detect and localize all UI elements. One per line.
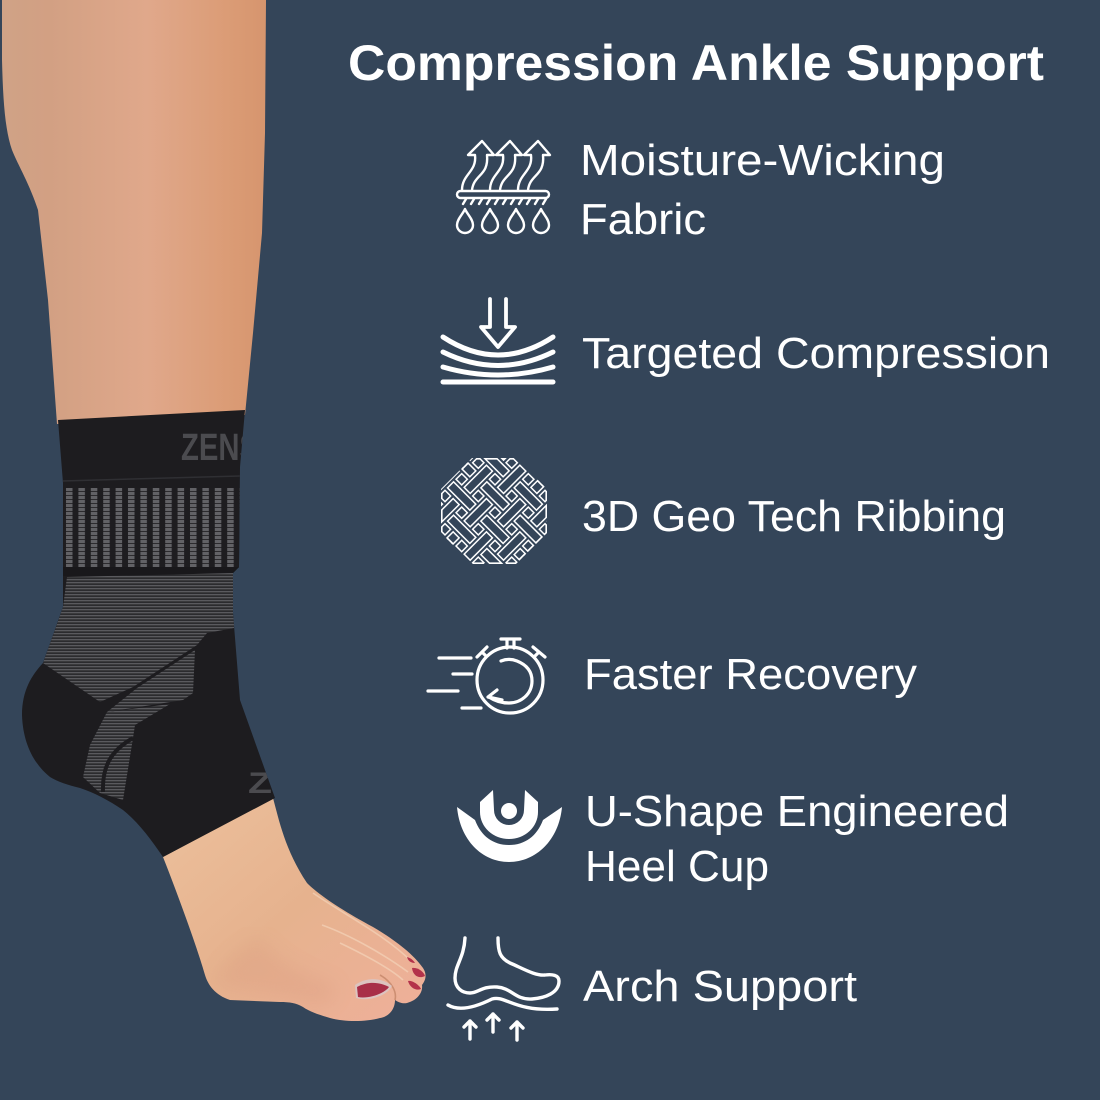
icon: heel cup xyxy=(457,790,562,862)
mesh zone centre xyxy=(107,650,195,712)
band seam xyxy=(62,476,240,481)
icon: arch support foot xyxy=(448,938,559,1040)
title: Compression Ankle Support xyxy=(348,35,1044,91)
feature: faster recovery xyxy=(428,639,917,713)
label line 2: Fabric xyxy=(580,195,706,244)
lower leg xyxy=(2,0,266,424)
icon: woven ribbing xyxy=(441,458,547,564)
mesh zone upper xyxy=(43,573,234,702)
logo upper: ZENS xyxy=(181,427,259,469)
mesh zone lower strip xyxy=(83,704,170,800)
toenails xyxy=(355,957,425,999)
photo: leg and foot wearing ankle sleeve xyxy=(0,0,426,1021)
logo lower: Z xyxy=(248,767,272,800)
label: 3D Geo Tech Ribbing xyxy=(582,492,1006,541)
feature: targeted compression xyxy=(443,299,1050,382)
rib band xyxy=(64,488,242,568)
toe creases xyxy=(313,893,412,980)
toe separation xyxy=(380,975,395,1000)
strip dark curve xyxy=(103,738,133,792)
label: Faster Recovery xyxy=(584,650,917,699)
feature: U-shape heel cup xyxy=(457,787,1009,891)
label: Moisture-Wicking xyxy=(580,136,945,185)
feature: 3D geo tech ribbing xyxy=(441,458,1004,564)
feature: moisture-wicking fabric xyxy=(457,136,945,244)
foot shading xyxy=(215,940,335,1004)
foot xyxy=(163,798,426,1021)
icon: compression xyxy=(443,299,553,382)
dark band xyxy=(66,567,239,573)
label: Targeted Compression xyxy=(582,329,1050,378)
label: Arch Support xyxy=(583,962,857,1011)
icon: moisture-wicking xyxy=(457,141,550,233)
feature: arch support xyxy=(448,938,857,1040)
label: U-Shape Engineered xyxy=(585,787,1009,836)
icon: stopwatch xyxy=(428,639,545,713)
ankle sleeve xyxy=(22,410,275,857)
label line 2: Heel Cup xyxy=(585,842,769,891)
